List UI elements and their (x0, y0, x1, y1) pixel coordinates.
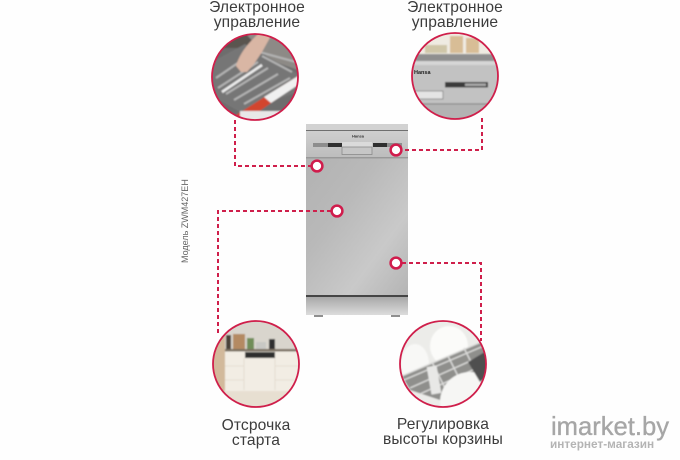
heading: bottom right feature: Регулировка (397, 416, 489, 433)
heading: bottom left feature: старта (232, 432, 280, 449)
watermark logo: интернет-магазин (550, 437, 654, 451)
photo circle: dish rack (399, 320, 487, 408)
photo circle: control panel: Hansa (414, 70, 431, 76)
dashed connector: bottom left (218, 211, 331, 336)
model label: Модель ZWM427EH (180, 179, 190, 263)
plinth (306, 295, 408, 297)
marker dots (312, 145, 401, 268)
heading: top right feature: управление (412, 14, 498, 31)
heading: bottom right feature: высоты корзины (383, 431, 503, 448)
watermark logo: imarket.by (551, 413, 669, 441)
photo circle: kitchen (211, 319, 301, 409)
dashed connector: top left (235, 120, 311, 166)
control panel (306, 131, 408, 158)
photo circle: cutlery tray (210, 32, 300, 122)
dashed connector: top right (403, 118, 482, 150)
heading: top left feature: управление (214, 14, 300, 31)
control panel: Hansa (352, 134, 365, 138)
heading: bottom left feature: Отсрочка (222, 417, 290, 434)
photo circle: control panel (410, 31, 500, 121)
dishwasher (306, 124, 408, 317)
dashed connector: bottom right (402, 263, 481, 341)
